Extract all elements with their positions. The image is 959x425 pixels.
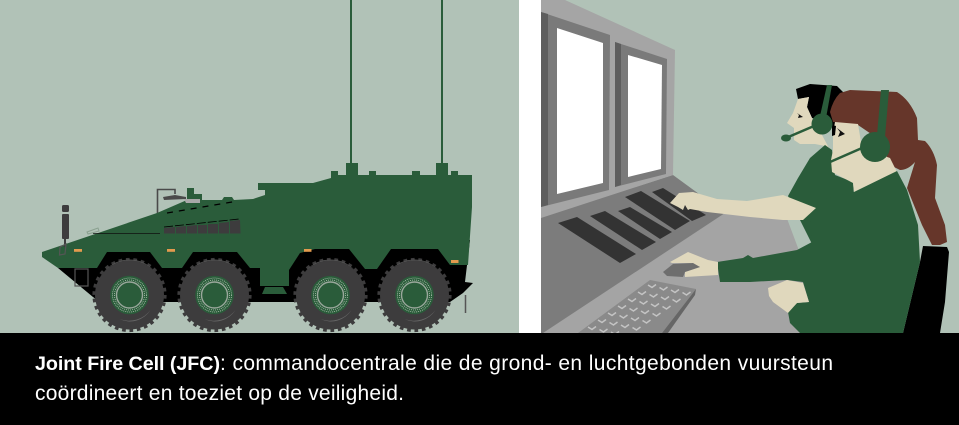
- left monitor: [541, 12, 610, 207]
- antennas: [351, 0, 442, 165]
- slat top line: [164, 219, 239, 227]
- caption text: [35, 352, 833, 405]
- armoured vehicle illustration: [42, 0, 473, 331]
- keyboard: [578, 280, 696, 337]
- panel: vehicle background: [0, 0, 519, 334]
- man face: [787, 97, 830, 150]
- woman lash shadow: [832, 125, 836, 136]
- caption text: Joint Fire Cell (JFC): [35, 353, 220, 375]
- mouse: [663, 263, 700, 277]
- control room illustration: [541, 0, 949, 337]
- woman ponytail and hair: [830, 90, 947, 245]
- man's arm: [670, 192, 816, 220]
- hatch outline: [75, 269, 88, 286]
- woman eye: [837, 128, 845, 137]
- desk surface: [541, 200, 830, 333]
- side slats: [164, 220, 240, 234]
- man body: [788, 145, 854, 250]
- lower step: [262, 287, 287, 294]
- wheels: [94, 259, 450, 331]
- orange markers: [74, 249, 458, 263]
- woman's other hand: [768, 280, 809, 313]
- man's headset: [781, 85, 832, 142]
- front bracket: [60, 244, 66, 255]
- woman body: [717, 171, 920, 333]
- hull crease line: [93, 232, 160, 234]
- console panel: [541, 175, 725, 333]
- panel: control room background: [541, 0, 959, 334]
- front sensor: [62, 205, 69, 247]
- vehicle underbody: [58, 240, 473, 302]
- caption text: coördineert en toeziet op de veiligheid.: [35, 382, 404, 405]
- console slots: [558, 188, 706, 263]
- woman's headset: [830, 90, 890, 162]
- woman's hand: [670, 252, 718, 277]
- keyboard keys: [588, 284, 690, 337]
- gun sight: [163, 195, 186, 200]
- man eye: [797, 113, 803, 118]
- hull: [42, 163, 472, 286]
- monitor housing: [541, 0, 675, 218]
- caption text: : commandocentrale die de grond- en luchtgebonden vuursteun: [220, 352, 833, 375]
- chair: [903, 246, 949, 333]
- grey strip: [184, 199, 200, 203]
- caption bar: [0, 333, 959, 425]
- headlight outline: [87, 228, 99, 234]
- right monitor: [615, 42, 667, 187]
- woman face and neck: [831, 122, 897, 192]
- periscope mount: [158, 190, 175, 215]
- man hair: [796, 84, 843, 135]
- dashed roof line: [167, 201, 238, 213]
- rear rod: [464, 295, 466, 313]
